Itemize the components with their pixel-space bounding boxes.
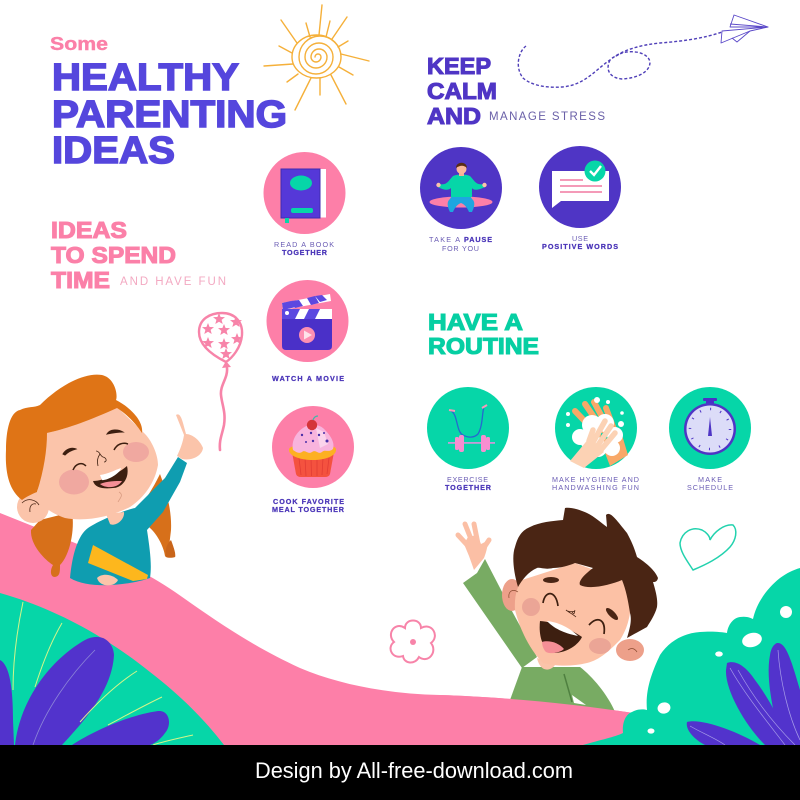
pink wave foreground in front of boy (440, 695, 640, 745)
item: watch a movie: WATCH A MOVIE (272, 374, 344, 383)
heading: keep calm (427, 53, 605, 129)
heading: ideas to spend time (51, 217, 226, 293)
item: read a book (264, 152, 346, 257)
item: make schedule: MAKE (698, 475, 722, 484)
heading: have a routine: HAVE A (428, 309, 523, 335)
character: boy (458, 508, 658, 712)
item: take a pause (420, 147, 502, 253)
heading: ideas to spend time: TIME (51, 267, 110, 293)
title: IDEAS (52, 130, 175, 172)
title: PARENTING (52, 94, 287, 136)
plant: teal bush bottom right (583, 568, 800, 745)
decoration: dashed flight trail (518, 32, 722, 87)
item: hygiene and handwashing: MAKE HYGIENE AND (552, 475, 639, 484)
item: cook favorite meal: COOK FAVORITE (273, 497, 344, 506)
background: teal hill bottom left (0, 593, 224, 745)
title: Some (50, 33, 108, 54)
item: cook favorite meal: MEAL TOGETHER (272, 505, 345, 514)
item: exercise together: TOGETHER (445, 483, 492, 492)
decoration: sun doodle (264, 5, 369, 110)
heading: have a routine: ROUTINE (428, 333, 539, 359)
heading: keep calm: KEEP (427, 53, 491, 79)
footer bar (0, 745, 800, 800)
item: hygiene and handwashing: HANDWASHING FUN (552, 483, 639, 492)
title (50, 33, 287, 172)
item: watch a movie (266, 280, 348, 383)
background: pink wave (0, 513, 640, 745)
item: make schedule (669, 387, 751, 492)
item: take a pause: TAKE A (429, 235, 460, 244)
item: exercise together (427, 387, 509, 492)
item: hygiene and handwashing (552, 387, 639, 492)
item: read a book: READ A BOOK (274, 240, 334, 249)
item: positive words (539, 146, 621, 251)
item: take a pause: PAUSE (464, 235, 492, 244)
character: girl (6, 375, 203, 585)
decoration: balloon (199, 313, 243, 450)
item: positive words: POSITIVE WORDS (542, 242, 618, 251)
footer bar: Design by All-free-download.com (255, 758, 573, 783)
plant: purple leaves bottom left (0, 602, 193, 745)
item: cook favorite meal (272, 406, 354, 514)
item: make schedule: SCHEDULE (687, 483, 733, 492)
heading: ideas to spend time: AND HAVE FUN (120, 276, 226, 288)
title: HEALTHY (52, 57, 239, 99)
icon: paper plane (721, 15, 768, 43)
item: positive words: USE (572, 234, 588, 243)
heading: ideas to spend time: IDEAS (51, 217, 127, 243)
decoration: flower outline (391, 620, 435, 663)
decoration: heart outline (680, 525, 736, 570)
heading: ideas to spend time: TO SPEND (51, 242, 176, 268)
heading: keep calm: AND (427, 103, 481, 129)
heading: have a routine (428, 309, 539, 359)
heading: keep calm: CALM (427, 78, 497, 104)
item: read a book: TOGETHER (282, 248, 328, 257)
item: take a pause: FOR YOU (442, 244, 479, 253)
heading: keep calm: MANAGE STRESS (489, 111, 605, 123)
item: exercise together: EXERCISE (447, 475, 488, 484)
